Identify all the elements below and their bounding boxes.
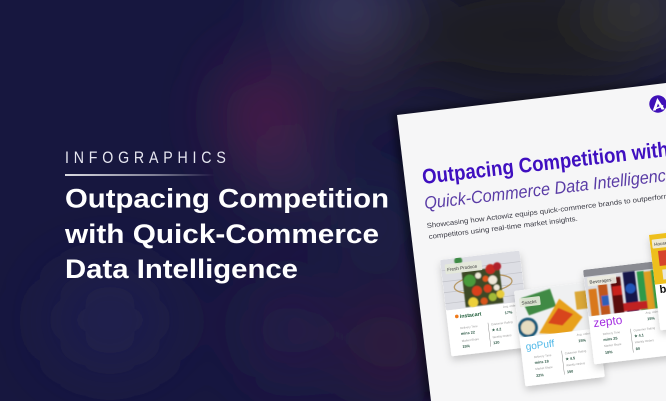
metrics: 15%: [578, 338, 587, 343]
metrics: 17%: [505, 310, 513, 315]
metrics: Weekly Orders: [635, 338, 655, 344]
metrics: 22%: [536, 373, 545, 378]
metrics: ★ 4.2: [491, 326, 502, 332]
main heading: Outpacing Competition: [65, 184, 389, 214]
metrics: mins 25: [603, 336, 618, 342]
metrics: Delivery Time: [534, 353, 552, 359]
metrics: ★ 4.5: [565, 355, 575, 361]
metrics: 120: [493, 341, 500, 345]
metrics: [458, 303, 521, 350]
photo: snack packs: [514, 283, 590, 338]
metrics: 80: [636, 347, 640, 351]
metrics: [601, 309, 663, 356]
metrics: Weekly Orders: [492, 333, 512, 339]
logo: Instacart: instacart: [460, 311, 482, 320]
metrics: [532, 331, 594, 378]
photo: soft drink bottles: [583, 262, 658, 316]
metrics: mins 18: [534, 359, 549, 365]
metrics: Avg. order: [503, 303, 516, 309]
card: Beverages / zepto: [583, 260, 666, 364]
metrics: 150: [567, 370, 574, 374]
metrics: ★ 4.1: [634, 332, 644, 338]
metrics: Market Share: [604, 342, 622, 348]
logo: goPuff: goPuff: [525, 339, 555, 353]
infographic sheet: [397, 83, 666, 401]
underline rule: [65, 174, 215, 176]
photo: household goods: [649, 226, 666, 285]
sheet description: Showcasing how Actowiz equips quick-commerce brands to outperform: [426, 193, 666, 230]
sheet description: [426, 193, 666, 241]
sheet description: competitors using real-time market insights.: [428, 216, 578, 241]
metrics: Market Share: [462, 337, 480, 343]
card: Snacks / goPuff: [514, 282, 605, 386]
logo: zepto: zepto: [593, 313, 623, 330]
sheet shadow: [392, 81, 666, 401]
label: Snacks: Snacks: [521, 299, 537, 306]
card: Fresh Produce / Instacart: [440, 250, 531, 356]
metrics: 18%: [605, 350, 613, 355]
metrics: Customer Rating: [565, 349, 587, 355]
metrics: Market Share: [535, 365, 553, 371]
icon: Actowiz logo: [648, 94, 666, 114]
photo: vegetables crate: [440, 250, 525, 311]
main heading: [64, 184, 389, 284]
metrics: Avg. order: [645, 309, 659, 315]
metrics: Delivery Time: [460, 324, 478, 330]
metrics: Weekly Orders: [566, 361, 586, 367]
metrics: 15%: [647, 316, 656, 321]
metrics: Avg. order: [576, 331, 590, 337]
label: Fresh Produce: Fresh Produce: [447, 264, 478, 272]
metrics: Customer Rating: [633, 326, 656, 332]
label: Beverages: Beverages: [589, 277, 612, 285]
metrics: Delivery Time: [602, 330, 621, 336]
metrics: Customer Rating: [491, 320, 513, 326]
metrics: mins 22: [461, 330, 475, 336]
main heading: with Quick-Commerce: [64, 219, 379, 249]
metrics: 15%: [462, 344, 471, 349]
card: Household / blinkit: [649, 226, 666, 330]
category label: INFOGRAPHICS: INFOGRAPHICS: [65, 149, 226, 167]
main heading: Data Intelligence: [65, 254, 298, 284]
